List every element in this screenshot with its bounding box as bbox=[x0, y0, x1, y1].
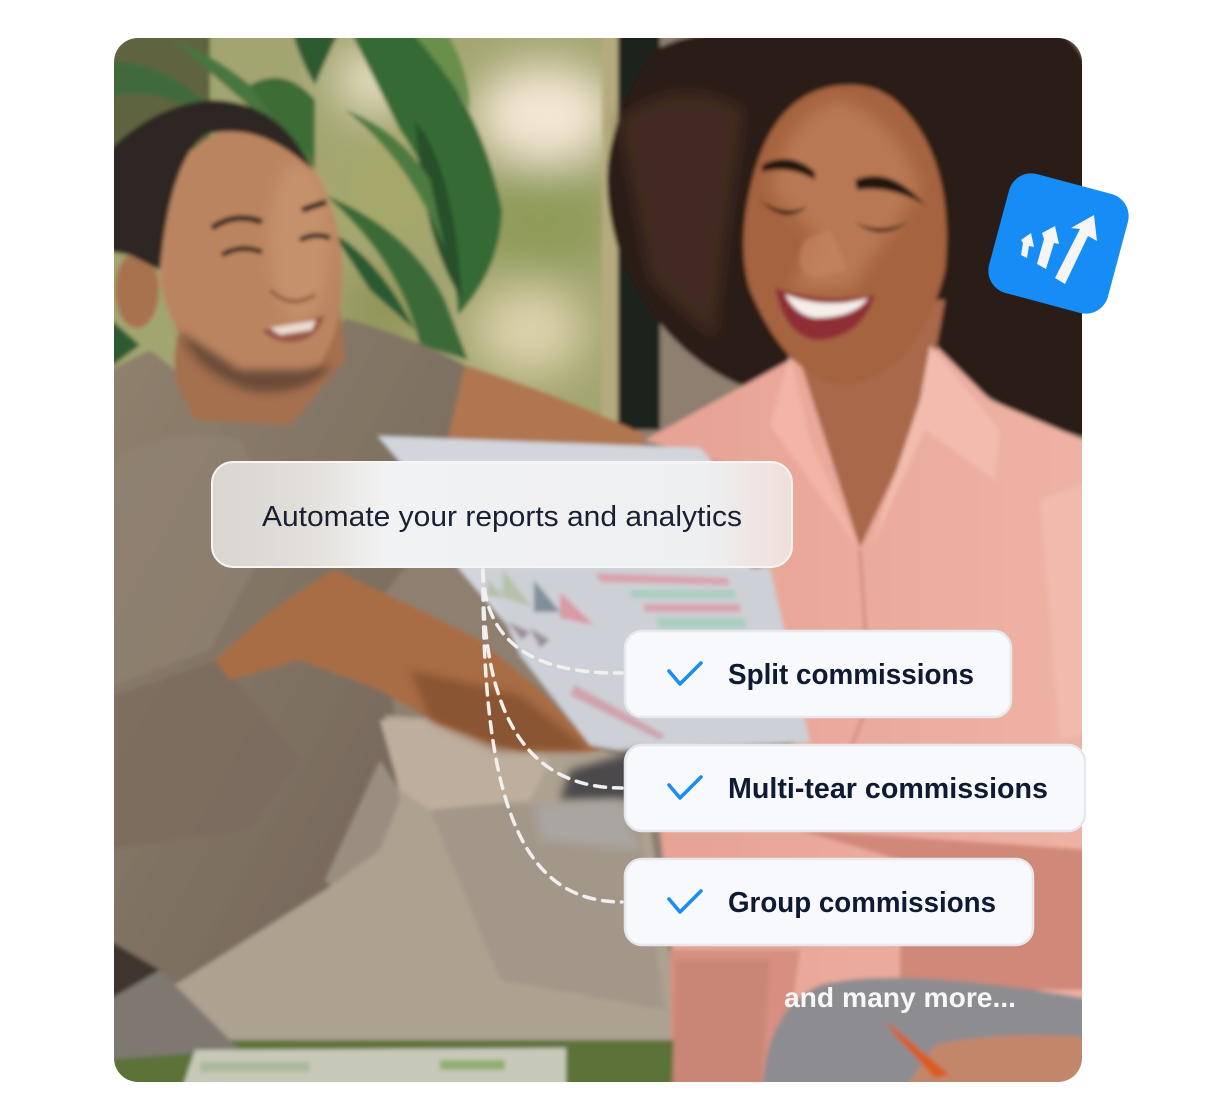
chip: group commissions bbox=[625, 859, 1033, 945]
dashed connector: to group commissions bbox=[483, 570, 622, 902]
icon: rising arrows badge bbox=[983, 168, 1134, 319]
grey knee and hand at bottom right bbox=[760, 975, 1082, 1082]
man: t-shirt and torso bbox=[100, 318, 465, 985]
chip: group commissions: Group commissions bbox=[728, 887, 996, 919]
dashed connector: to multi-tier commissions bbox=[483, 570, 622, 788]
man: trousers bbox=[175, 715, 680, 1050]
blurred garden background bbox=[114, 38, 619, 423]
dark object and pale folds under paper bbox=[535, 750, 640, 850]
callout: automate reports: Automate your reports and analytics bbox=[262, 501, 742, 533]
grass and papers on the floor bbox=[114, 941, 768, 1082]
woman: curly hair bbox=[607, 29, 1095, 440]
man: extended arm bbox=[215, 570, 600, 752]
chip: multi-tear commissions: Multi-tear commissions bbox=[728, 773, 1048, 805]
chip: split commissions: Split commissions bbox=[728, 659, 974, 691]
woman: pink shirt bbox=[645, 300, 1095, 1095]
callout: automate reports bbox=[212, 462, 792, 567]
woman: face bbox=[744, 85, 947, 385]
report paper bbox=[378, 436, 810, 750]
man: head, neck and hair bbox=[100, 100, 345, 425]
plant leaves bbox=[100, 30, 502, 375]
man: right arm behind bbox=[447, 364, 646, 447]
caption: and many more: and many more... bbox=[784, 982, 1016, 1013]
photo: two colleagues reviewing a report bbox=[100, 20, 1100, 1100]
window pole and dark pillar bbox=[602, 20, 660, 430]
chip: split commissions bbox=[625, 631, 1011, 717]
chip: multi-tear commissions bbox=[625, 745, 1085, 831]
dashed connector: to split commissions bbox=[483, 570, 622, 673]
